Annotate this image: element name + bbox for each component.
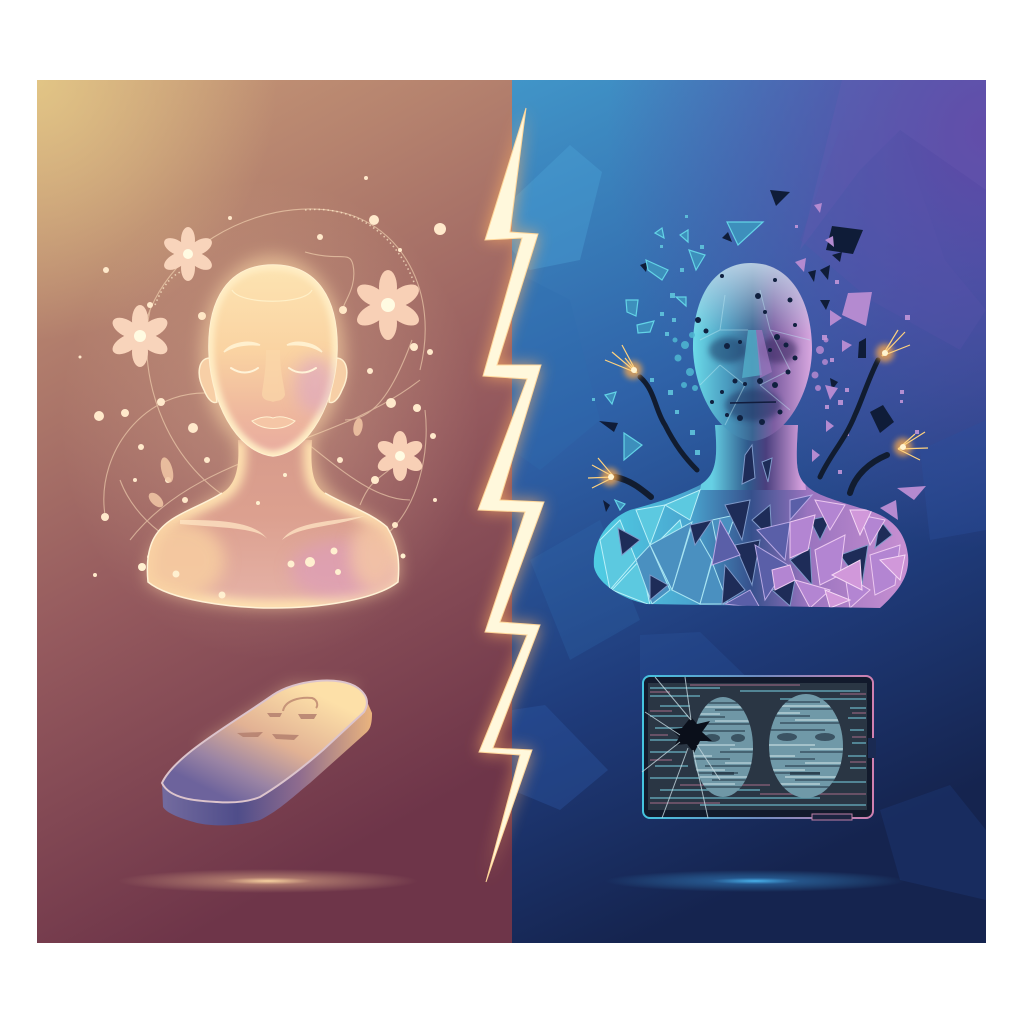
facial features bbox=[224, 342, 322, 428]
head bbox=[209, 265, 337, 456]
pill score marks bbox=[237, 713, 317, 740]
sparkling dots bbox=[78, 176, 446, 577]
left ear fragments bbox=[672, 332, 698, 391]
cable right upper bbox=[820, 360, 878, 477]
purple shards bbox=[795, 203, 926, 520]
pill side bbox=[162, 690, 372, 825]
icon: flower left bbox=[109, 305, 171, 367]
dark navy facets bbox=[618, 445, 892, 606]
small scattered fragments bbox=[592, 215, 704, 455]
dark mouth region bbox=[725, 389, 781, 421]
pill tablet bbox=[162, 681, 372, 825]
spark glows bbox=[588, 330, 928, 488]
spark left lower bbox=[588, 458, 619, 488]
cyan facets bbox=[600, 490, 700, 605]
mouth line bbox=[730, 402, 776, 403]
lips bbox=[252, 417, 295, 428]
dark shards bbox=[599, 190, 894, 512]
cable left lower bbox=[615, 477, 651, 497]
blue facets bbox=[636, 515, 735, 604]
frame notch right bbox=[868, 738, 876, 758]
panel: cool right side bbox=[512, 80, 986, 943]
pill glow bbox=[200, 685, 360, 770]
neck and shoulders bbox=[147, 440, 399, 608]
left ear bbox=[199, 358, 217, 402]
body rim bbox=[147, 493, 399, 608]
head mosaic bbox=[690, 260, 815, 425]
flying shards bbox=[592, 190, 926, 520]
face details bbox=[704, 733, 835, 775]
cable left upper bbox=[640, 377, 697, 470]
floor glow right bbox=[605, 870, 905, 892]
icon: leaves bbox=[146, 417, 364, 510]
screen frame bbox=[643, 676, 873, 818]
outer glow bbox=[148, 440, 399, 608]
crack lines bbox=[642, 677, 720, 818]
frame tab bottom bbox=[812, 814, 852, 820]
floor glow left bbox=[118, 869, 418, 893]
dark eye region bbox=[709, 337, 747, 363]
dotted orbit arcs bbox=[155, 209, 415, 305]
crack hole bbox=[671, 717, 712, 753]
cables with sparks bbox=[615, 360, 887, 497]
closed eyes bbox=[231, 368, 316, 372]
right ear fragments bbox=[812, 338, 828, 391]
glowing dots over bust bbox=[138, 473, 406, 598]
spark left upper bbox=[605, 345, 642, 379]
head bbox=[693, 263, 812, 441]
spark right lower bbox=[894, 432, 928, 460]
figure: calm glowing bust bbox=[125, 255, 400, 608]
cranium cap bbox=[694, 263, 810, 330]
glitch scan lines bbox=[650, 685, 866, 805]
icon: flower top bbox=[161, 227, 215, 281]
lightning bolt divider bbox=[478, 108, 544, 882]
face chips bbox=[695, 274, 798, 425]
nose highlight bbox=[742, 330, 762, 378]
orbiting light lines bbox=[104, 209, 426, 569]
right glitch face bbox=[768, 693, 844, 799]
spark right upper bbox=[876, 330, 910, 362]
nose bbox=[262, 350, 285, 402]
chest mosaic bbox=[600, 445, 905, 608]
body inner glow bbox=[125, 440, 400, 608]
collarbone highlights bbox=[180, 516, 365, 540]
panel: warm left side bbox=[37, 80, 512, 943]
violet facets bbox=[772, 500, 900, 608]
screen fill bbox=[648, 683, 867, 810]
neck colour bbox=[700, 425, 806, 490]
cable right lower bbox=[850, 455, 887, 493]
neck and shoulders bbox=[594, 425, 908, 608]
icon: flower right bbox=[353, 270, 423, 340]
icon: flower lower right bbox=[375, 431, 425, 481]
glow: halo behind calm figure bbox=[60, 180, 480, 660]
figure: fractured bust bbox=[594, 260, 908, 608]
pink facets bbox=[825, 510, 905, 608]
indigo facets bbox=[712, 495, 812, 608]
cracked screen with glitch faces bbox=[642, 676, 876, 820]
pill emblem bbox=[283, 698, 317, 711]
brows bbox=[224, 342, 322, 352]
pill top bbox=[162, 681, 367, 802]
small violet fragments bbox=[795, 225, 919, 474]
left glitch face bbox=[693, 697, 753, 797]
head inner glow bbox=[209, 265, 337, 456]
cyan glass shards bbox=[605, 222, 763, 510]
right ear bbox=[329, 358, 347, 402]
facet lines bbox=[700, 290, 810, 425]
